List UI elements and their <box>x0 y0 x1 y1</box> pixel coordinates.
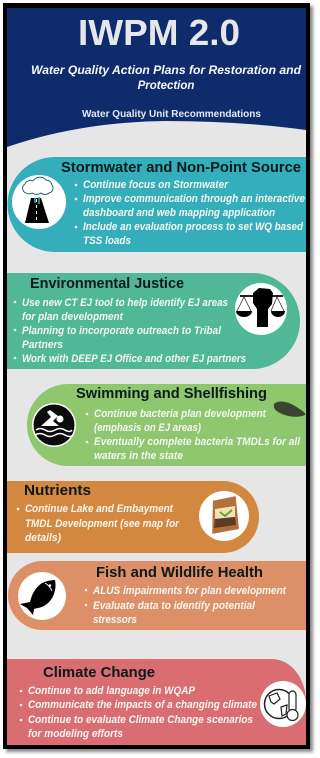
subtitle <box>31 65 302 92</box>
bullets: swimming and shellfishing <box>86 408 301 462</box>
heading: nutrients: Nutrients <box>24 483 91 499</box>
subtitle: Protection <box>138 80 194 92</box>
bullets: climate change: Continue to evaluate Climate Change scenarios <box>28 714 253 726</box>
panel: nutrients <box>7 481 259 553</box>
bullets: nutrients <box>17 503 180 544</box>
subtitle: Water Quality Action Plans for Restoration and <box>31 65 302 77</box>
bullets: fish and wildlife health <box>85 585 287 626</box>
icon: fish <box>18 572 66 620</box>
bullets: environmental justice: Partners <box>22 339 63 351</box>
bullets: fish and wildlife health: stressors <box>93 614 137 626</box>
bullets: environmental justice <box>14 297 246 365</box>
bullets: nutrients: TMDL Development (see map for <box>25 518 180 530</box>
bullets: stormwater: TSS loads <box>83 235 131 247</box>
heading: swimming and shellfishing: Swimming and Shellfishing <box>76 386 267 402</box>
icon: swimmer <box>32 403 76 447</box>
panel: stormwater <box>7 157 306 252</box>
bullets: stormwater: Continue focus on Stormwater <box>83 179 229 191</box>
heading: climate change: Climate Change <box>43 665 155 681</box>
panel: climate change <box>7 659 306 745</box>
heading: stormwater: Stormwater and Non-Point Source <box>61 160 301 176</box>
bullets: swimming and shellfishing: Continue bacteria plan development <box>94 408 267 420</box>
panel: environmental justice <box>7 273 300 369</box>
header banner <box>7 8 306 147</box>
heading: fish and wildlife health: Fish and Wildlife Health <box>96 565 263 581</box>
bullets: stormwater: dashboard and web mapping application <box>83 207 275 219</box>
heading: environmental justice: Environmental Justice <box>30 276 184 292</box>
icon: fertilizer bag <box>199 491 249 541</box>
panel: fish and wildlife health <box>8 561 306 630</box>
bullets: stormwater <box>75 179 305 247</box>
icon: mussel <box>274 401 305 417</box>
bullets: climate change: Communicate the impacts of a changing climate <box>28 699 257 711</box>
icon: storm cloud over road <box>12 175 66 229</box>
icon: fist and scales <box>235 283 287 335</box>
bullets: environmental justice: Work with DEEP EJ Office and other EJ partners <box>22 353 246 365</box>
bullets: swimming and shellfishing: waters in the state <box>94 450 183 462</box>
bullets: environmental justice: Use new CT EJ tool to help identify EJ areas <box>22 297 228 309</box>
bullets: swimming and shellfishing: Eventually complete bacteria TMDLs for all <box>94 436 301 448</box>
title: IWPM 2.0 <box>78 12 240 53</box>
bullets: fish and wildlife health: Evaluate data to identify potential <box>93 600 256 612</box>
unit recommendations line: Water Quality Unit Recommendations <box>82 108 261 120</box>
bullets: environmental justice: for plan development <box>22 311 124 323</box>
bullets: climate change <box>20 685 257 740</box>
icon: globe and thermometer <box>260 681 306 727</box>
bullets: nutrients: Continue Lake and Embayment <box>25 503 174 515</box>
bullets: nutrients: details) <box>25 532 61 544</box>
bullets: climate change: Continue to add language in WQAP <box>28 685 196 697</box>
panel: swimming and shellfishing <box>27 384 306 466</box>
bullets: swimming and shellfishing: (emphasis on EJ areas) <box>94 422 201 434</box>
bullets: fish and wildlife health: ALUS impairments for plan development <box>92 585 287 597</box>
bullets: environmental justice: Planning to incorporate outreach to Tribal <box>22 325 222 337</box>
bullets: climate change: for modeling efforts <box>28 728 123 740</box>
